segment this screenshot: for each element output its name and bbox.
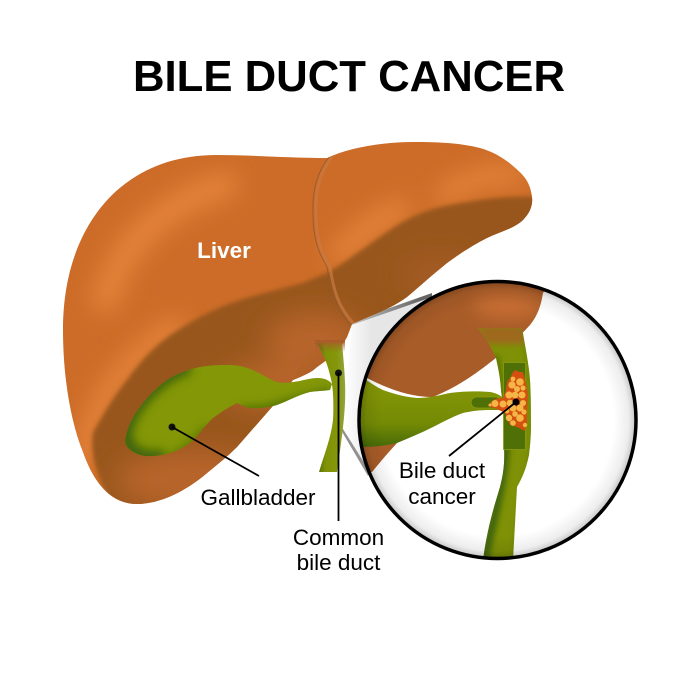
label: common bile duct: bile duct bbox=[297, 550, 381, 575]
liver shaded underside bbox=[90, 194, 532, 504]
liver bbox=[63, 142, 532, 504]
title: BILE DUCT CANCER bbox=[133, 52, 565, 101]
tumour bbox=[488, 370, 528, 431]
label: common bile duct: Common bbox=[293, 525, 384, 550]
lobe fissure bbox=[313, 157, 354, 325]
zoomed bile duct bbox=[478, 328, 531, 557]
label: bile duct cancer bbox=[399, 458, 486, 509]
lighter shade zones bbox=[115, 261, 480, 510]
pointer: bile duct cancer bbox=[449, 398, 520, 456]
common bile duct bbox=[315, 340, 345, 472]
lens rim bbox=[359, 282, 636, 558]
pointer: gallbladder bbox=[168, 424, 259, 476]
label: bile duct cancer: Bile duct bbox=[399, 458, 486, 483]
zoomed gallbladder neck bbox=[360, 380, 503, 447]
pointer: common bile duct bbox=[335, 370, 342, 521]
label: common bile duct bbox=[293, 525, 384, 575]
magnifier connector bbox=[341, 293, 432, 476]
label: gallbladder: Gallbladder bbox=[200, 485, 316, 510]
gallbladder bbox=[120, 340, 345, 472]
label: bile duct cancer: cancer bbox=[408, 484, 476, 509]
duct window bbox=[504, 362, 526, 450]
magnifier lens bbox=[340, 270, 636, 565]
cystic duct window bbox=[471, 397, 501, 408]
liver highlights bbox=[85, 175, 515, 460]
label: liver: Liver bbox=[197, 238, 251, 263]
zoomed liver bbox=[363, 283, 544, 472]
